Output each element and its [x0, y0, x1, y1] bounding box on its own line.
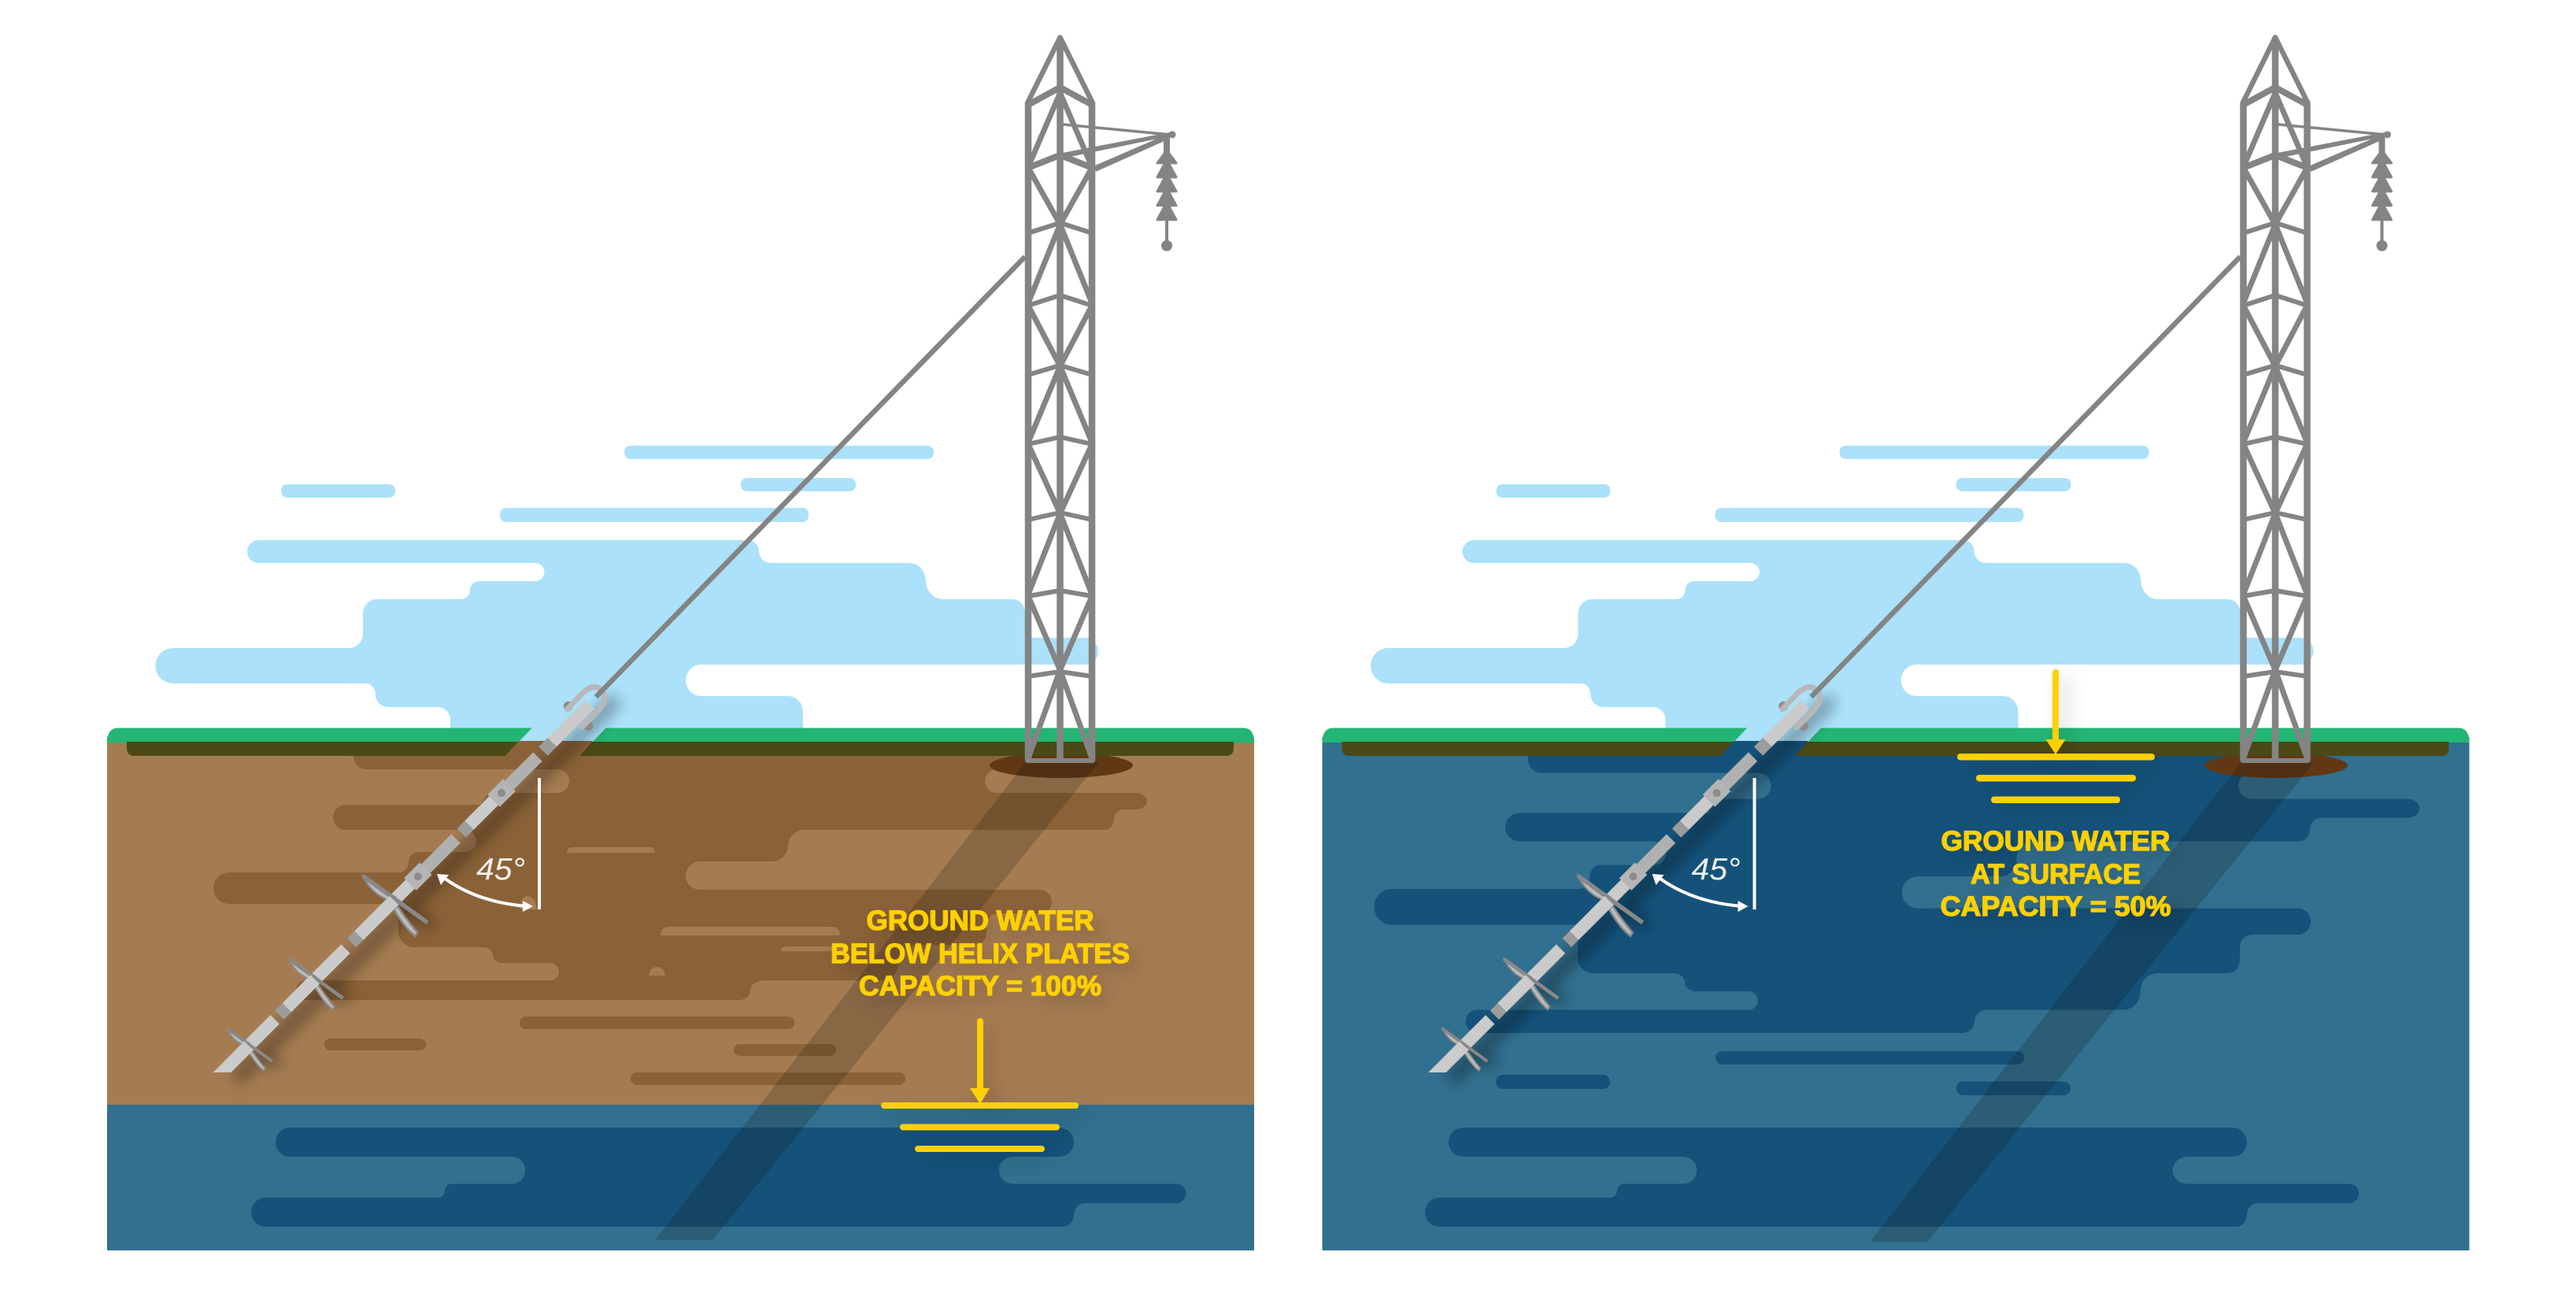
grass strip: [107, 728, 1254, 743]
callout text: ground water at surface: AT SURFACE: [1971, 858, 2141, 890]
dark water patches: [251, 1128, 1186, 1227]
callout text: ground water below helix plates: BELOW HELIX PLATES: [831, 938, 1130, 969]
grass strip: [1323, 728, 2469, 743]
clouds: [156, 446, 1098, 729]
dark topsoil band: [127, 742, 1234, 756]
transmission tower with guy wire: [596, 38, 1176, 761]
tower shadow: [655, 762, 1099, 1240]
clouds: [1371, 446, 2313, 729]
dark topsoil band: [1342, 742, 2448, 756]
dark water patches: [1374, 754, 2419, 1227]
panel: ground water at surface: [1323, 38, 2469, 1250]
callout text: ground water at surface: GROUND WATER: [1941, 825, 2170, 857]
panel: ground water below helix plates: [107, 38, 1254, 1250]
angle indicator 45 degrees: [437, 778, 541, 912]
callout text: ground water below helix plates: CAPACITY = 100%: [859, 970, 1101, 1002]
helical anchor: [1405, 661, 1853, 1109]
callout text: ground water at surface: [1940, 825, 2171, 922]
anchor trench: [1720, 728, 1822, 756]
saturated ground layer: [1323, 737, 2469, 1250]
foot shadow ellipse: [990, 753, 1133, 778]
callout text: ground water at surface: CAPACITY = 50%: [1940, 891, 2171, 922]
soil moisture patches: [213, 754, 1147, 1085]
arrow: water level marker: [1957, 669, 2155, 803]
anchor trench: [505, 728, 606, 756]
helical anchor: [190, 661, 638, 1109]
arrow: water level marker: [881, 1018, 1079, 1152]
transmission tower with guy wire: [1811, 38, 2392, 761]
foot shadow ellipse: [2204, 753, 2348, 778]
soil layer: [107, 737, 1254, 1107]
angle indicator 45 degrees: [1652, 778, 1756, 912]
callout text: ground water below helix plates: [831, 905, 1130, 1002]
tower shadow: [1871, 762, 2315, 1242]
water table layer: [107, 1105, 1254, 1250]
callout text: ground water below helix plates: GROUND WATER: [866, 905, 1094, 936]
